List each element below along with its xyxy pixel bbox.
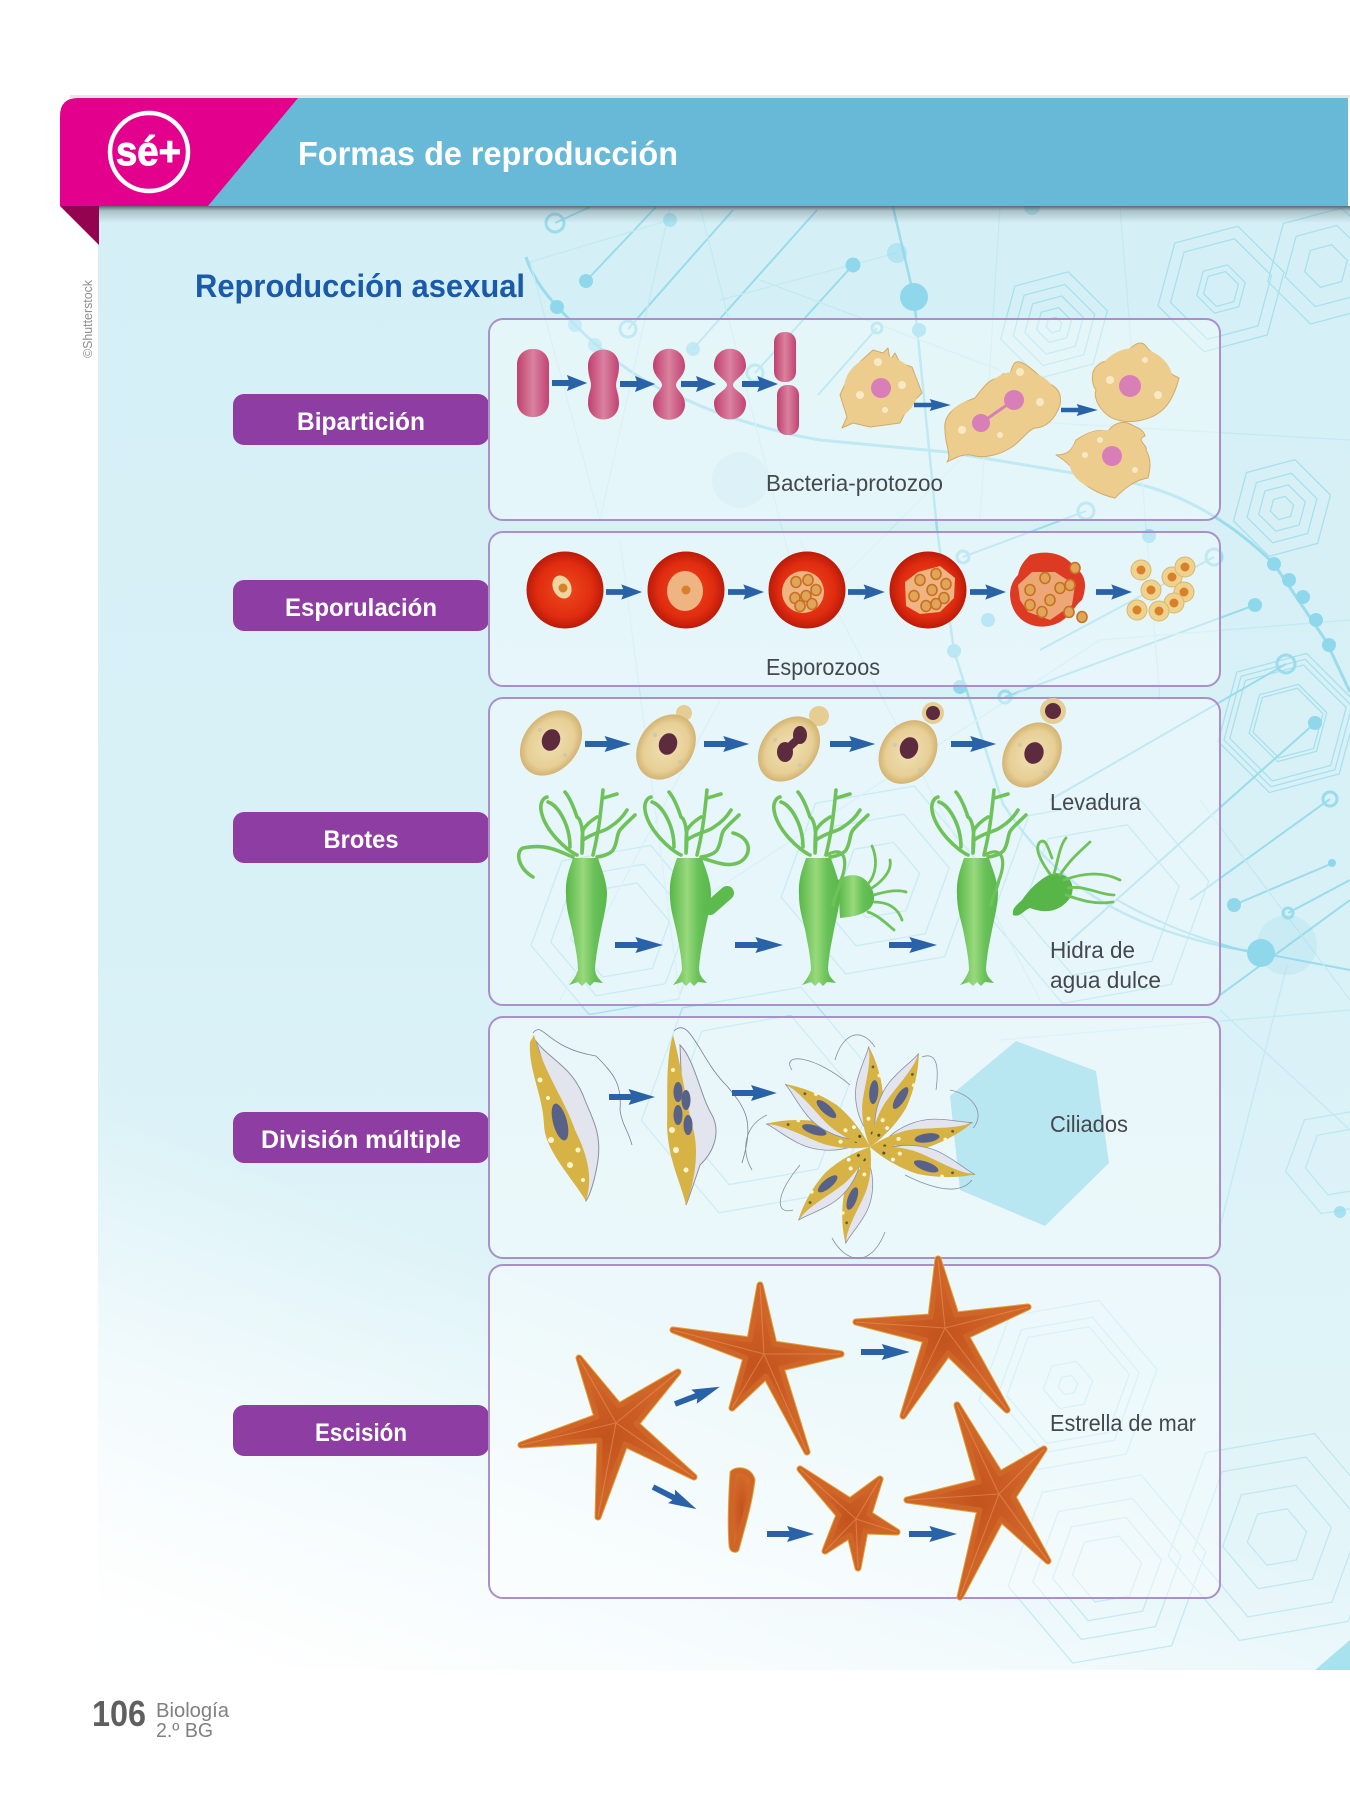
bacteria sequence [517, 332, 799, 435]
ciliate rosette [746, 1035, 978, 1258]
caption: Esporozoos: Esporozoos [766, 654, 880, 680]
label: División múltiple [233, 1112, 489, 1163]
label: Brotes: Brotes [324, 826, 398, 854]
footer: page number and subject [92, 1693, 230, 1742]
network hexagons and lines are decoration [516, 195, 1350, 1693]
footer: page number and subject: 2.º BG [156, 1720, 213, 1742]
panel: Bipartición [489, 319, 1220, 520]
panel: Esporulación [489, 532, 1220, 686]
label: Escisión: Escisión [315, 1419, 407, 1447]
credit: Shutterstock: ©Shutterstock [81, 279, 95, 358]
caption: Bacteria-protozoo: Bacteria-protozoo [766, 470, 943, 496]
panel: División múltiple [489, 1017, 1220, 1258]
label: Esporulación [233, 580, 489, 631]
caption: Hidra de agua dulce: Hidra de [1050, 937, 1135, 963]
label: Esporulación: Esporulación [285, 594, 437, 622]
icon: sé+ logo: sé+ [116, 128, 181, 174]
footer: page number and subject: 106 [92, 1693, 146, 1734]
caption: Hidra de agua dulce: agua dulce [1050, 967, 1161, 993]
spore cluster [1127, 557, 1195, 621]
label: Brotes [233, 812, 489, 863]
background panel [98, 195, 1350, 1693]
title: Formas de reproducción [298, 135, 678, 172]
caption: Hidra de agua dulce [1050, 937, 1161, 993]
panel: Escisión [489, 1259, 1220, 1598]
label: Bipartición [233, 394, 489, 445]
caption: Ciliados: Ciliados [1050, 1111, 1128, 1137]
hydra budding sequence [519, 790, 1120, 986]
starfish regeneration [521, 1259, 1048, 1597]
arrow [609, 1089, 655, 1105]
icon: sé+ logo [110, 113, 188, 191]
header ribbon [60, 95, 1350, 245]
arrow [732, 1085, 777, 1101]
yeast budding sequence [507, 698, 1074, 799]
label: División múltiple: División múltiple [261, 1126, 461, 1154]
panel: Brotes [489, 698, 1220, 1005]
label: Bipartición: Bipartición [297, 408, 425, 436]
ciliate stage 2 [667, 1028, 748, 1205]
amoeba sequence [840, 343, 1179, 498]
caption: Levadura: Levadura [1050, 789, 1141, 815]
label: Escisión [233, 1405, 489, 1456]
ciliate stage 1 [530, 1030, 632, 1201]
footer: page number and subject: Biología [156, 1700, 230, 1722]
caption: Estrella de mar: Estrella de mar [1050, 1410, 1196, 1436]
red blood cell sequence [526, 552, 1132, 628]
heading: Reproducción asexual: Reproducción asexual [195, 268, 525, 304]
